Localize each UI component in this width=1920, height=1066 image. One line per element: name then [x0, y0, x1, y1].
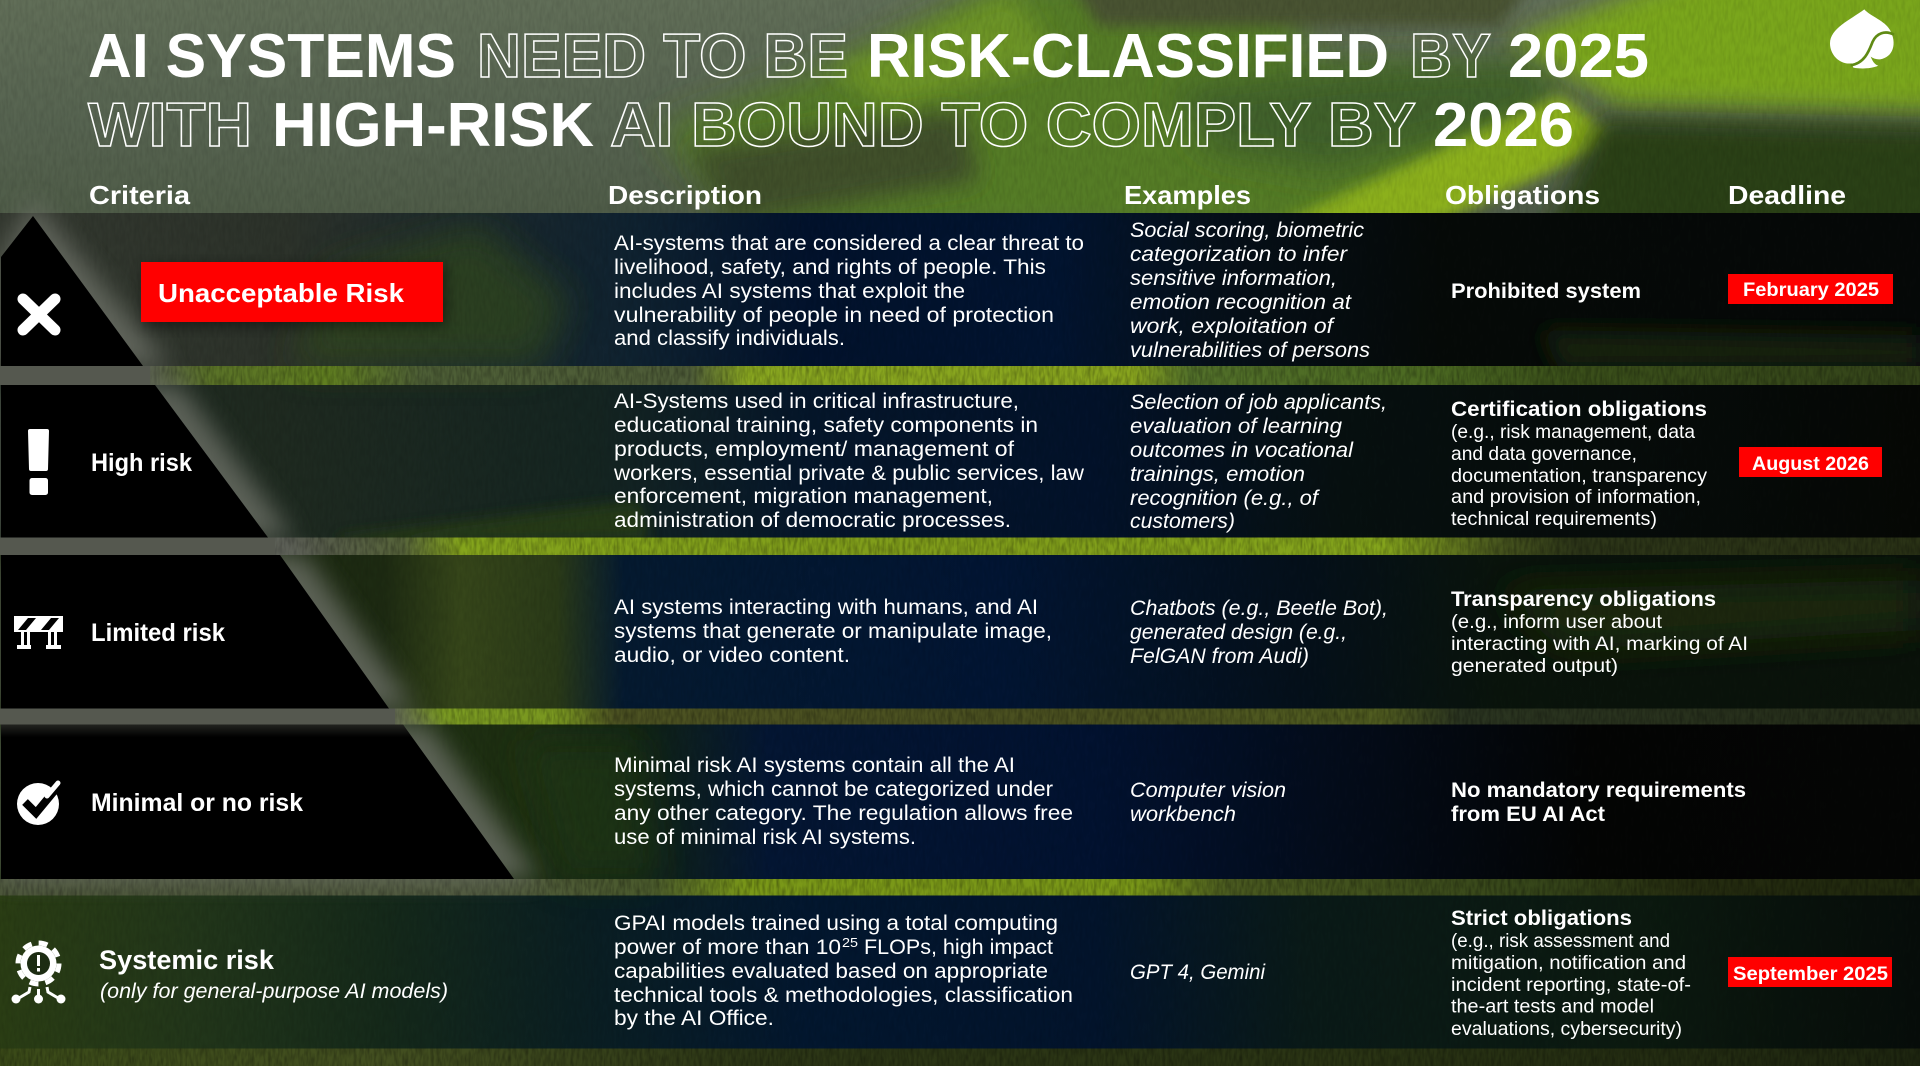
row 2 examples [1130, 390, 1387, 533]
row 3 obligations: generated output) [1451, 655, 1618, 677]
row 2 obligations: and data governance, [1451, 443, 1637, 465]
row 5 obligations: incident reporting, state-of- [1451, 974, 1691, 996]
table row backgrounds [0, 213, 1920, 1048]
row 3 description: AI systems interacting with humans, and AI [614, 595, 1038, 619]
row 1 description: AI-systems that are considered a clear threat to [614, 231, 1084, 255]
title: RISK-CLASSIFIED [867, 22, 1389, 91]
row 5 description: capabilities evaluated based on appropriate [614, 959, 1048, 983]
label: systemic risk [99, 945, 448, 1003]
title: NEED TO BE [477, 22, 848, 91]
row 5 obligations: Strict obligations [1451, 906, 1632, 930]
row 2 obligations: (e.g., risk management, data [1451, 421, 1695, 443]
row 4 examples: workbench [1130, 802, 1236, 826]
row 2 description [613, 389, 1084, 532]
row 2 obligations: Certification obligations [1451, 397, 1707, 421]
row 2 description: enforcement, migration management, [614, 484, 993, 508]
pyramid tier: limited [1, 555, 389, 708]
icon: check [17, 783, 60, 825]
row 5 examples: GPT 4, Gemini [1130, 960, 1266, 984]
pyramid tier: high [1, 385, 268, 538]
label: systemic risk: Systemic risk [99, 945, 275, 975]
row 2 description: administration of democratic processes. [614, 508, 1011, 532]
badge: unacceptable risk: Unacceptable Risk [158, 278, 405, 308]
deadline: February 2025 [1728, 274, 1893, 304]
row 3 obligations: Transparency obligations [1451, 587, 1716, 611]
title: AI SYSTEMS [88, 22, 456, 91]
row 5 obligations: (e.g., risk assessment and [1451, 930, 1670, 952]
column headers: Deadline [1728, 180, 1846, 210]
row 1 description: includes AI systems that exploit the [614, 279, 965, 303]
row 3 examples: generated design (e.g., [1130, 620, 1347, 644]
row 2 examples: recognition (e.g., of [1130, 486, 1320, 510]
row 1 description: livelihood, safety, and rights of people. This [614, 255, 1046, 279]
row 3 description: audio, or video content. [614, 643, 850, 667]
gray veil in gaps left [0, 366, 395, 724]
row 5 obligations [1451, 906, 1691, 1040]
row 3 examples: FelGAN from Audi) [1130, 644, 1309, 668]
row 5 description: GPAI models trained using a total computing [614, 911, 1058, 935]
row 3 obligations [1451, 587, 1748, 677]
deadline: September 2025 [1728, 957, 1892, 987]
column headers [89, 180, 1846, 210]
row 4 description: any other category. The regulation allows free [614, 801, 1073, 825]
row 1 examples: Social scoring, biometric [1130, 218, 1364, 242]
icon: road barrier [14, 616, 63, 649]
title: WITH [88, 91, 252, 160]
row 5 obligations: mitigation, notification and [1451, 952, 1686, 974]
title: BY [1410, 22, 1491, 91]
column headers: Obligations [1445, 180, 1600, 210]
column headers: Examples [1124, 180, 1251, 210]
row 1 examples: work, exploitation of [1130, 314, 1335, 338]
row 4 obligations: No mandatory requirements [1451, 778, 1746, 802]
row 5 description: 25 [842, 936, 858, 950]
pyramid shadow [0, 200, 540, 879]
title: 2026 [1433, 91, 1574, 160]
row 3 examples: Chatbots (e.g., Beetle Bot), [1130, 596, 1388, 620]
row 5 description: FLOPs, high impact [864, 935, 1053, 959]
icon: X [23, 299, 55, 330]
row 4 description: use of minimal risk AI systems. [614, 825, 916, 849]
row 5 description [614, 911, 1073, 1030]
row 1 examples: emotion recognition at [1130, 290, 1352, 314]
row 4 description: systems, which cannot be categorized under [614, 777, 1053, 801]
pyramid tier: unacceptable [1, 216, 143, 366]
row 2 description: workers, essential private & public services, law [613, 461, 1084, 485]
row 2 description: educational training, safety components in [614, 413, 1038, 437]
row 2 description: AI-Systems used in critical infrastructure, [614, 389, 1019, 413]
row 5 description: by the AI Office. [614, 1006, 774, 1030]
title: AI BOUND TO COMPLY BY [610, 91, 1416, 160]
deadline: September 2025: September 2025 [1733, 964, 1888, 985]
row 3 description: systems that generate or manipulate image, [614, 619, 1052, 643]
row 2 obligations: technical requirements) [1451, 508, 1657, 530]
column headers: Description [608, 180, 762, 210]
row 1 description [614, 231, 1084, 350]
deadline: August 2026: August 2026 [1752, 454, 1869, 475]
label: minimal or no risk: Minimal or no risk [91, 789, 303, 817]
row 2 examples: trainings, emotion [1130, 462, 1305, 486]
row 5 obligations: the-art tests and model [1451, 996, 1654, 1018]
row 1 examples: categorization to infer [1130, 242, 1348, 266]
deadline: August 2026 [1739, 447, 1882, 477]
row 2 description: products, employment/ management of [614, 437, 1014, 461]
row 1 examples [1130, 218, 1370, 362]
column headers: Criteria [89, 180, 191, 210]
label: limited risk: Limited risk [91, 619, 225, 647]
row 4 examples [1130, 778, 1286, 826]
deadline: February 2025: February 2025 [1743, 280, 1879, 301]
row 2 examples: customers) [1130, 509, 1235, 533]
row 4 examples: Computer vision [1130, 778, 1286, 802]
row 2 obligations: and provision of information, [1451, 486, 1701, 508]
title [88, 22, 1649, 160]
row 1 description: and classify individuals. [614, 326, 845, 350]
row 2 obligations [1451, 397, 1707, 530]
row 4 description [614, 753, 1073, 849]
row 3 description [614, 595, 1052, 667]
icon: exclamation [28, 429, 49, 495]
row 2 examples: outcomes in vocational [1130, 438, 1354, 462]
row 1 examples: sensitive information, [1130, 266, 1337, 290]
label: systemic risk: (only for general-purpose AI models) [100, 979, 448, 1003]
row 3 examples [1130, 596, 1388, 668]
pyramid tier: minimal [1, 724, 514, 879]
title: 2025 [1508, 22, 1649, 91]
row 2 examples: Selection of job applicants, [1130, 390, 1387, 414]
row 2 obligations: documentation, transparency [1451, 465, 1707, 487]
badge: unacceptable risk [141, 262, 446, 326]
row 5 description: technical tools & methodologies, classification [614, 983, 1073, 1007]
row 1 obligations: Prohibited system [1451, 279, 1641, 303]
row 4 obligations: from EU AI Act [1451, 802, 1605, 826]
row 4 description: Minimal risk AI systems contain all the AI [614, 753, 1015, 777]
row 3 obligations: (e.g., inform user about [1451, 611, 1663, 633]
row 4 obligations [1451, 778, 1746, 826]
title: HIGH-RISK [272, 91, 594, 160]
logo: spade [1830, 9, 1894, 68]
row 5 obligations: evaluations, cybersecurity) [1451, 1018, 1682, 1040]
row 2 examples: evaluation of learning [1130, 414, 1342, 438]
row 3 obligations: interacting with AI, marking of AI [1451, 633, 1748, 655]
label: high risk: High risk [91, 449, 192, 477]
row 5 description: power of more than 10 [614, 935, 841, 959]
row 1 examples: vulnerabilities of persons [1130, 338, 1370, 362]
row 1 description: vulnerability of people in need of protection [614, 303, 1054, 327]
pyramid tier top fade [1, 724, 412, 737]
icon: gear with nodes [12, 943, 66, 1004]
